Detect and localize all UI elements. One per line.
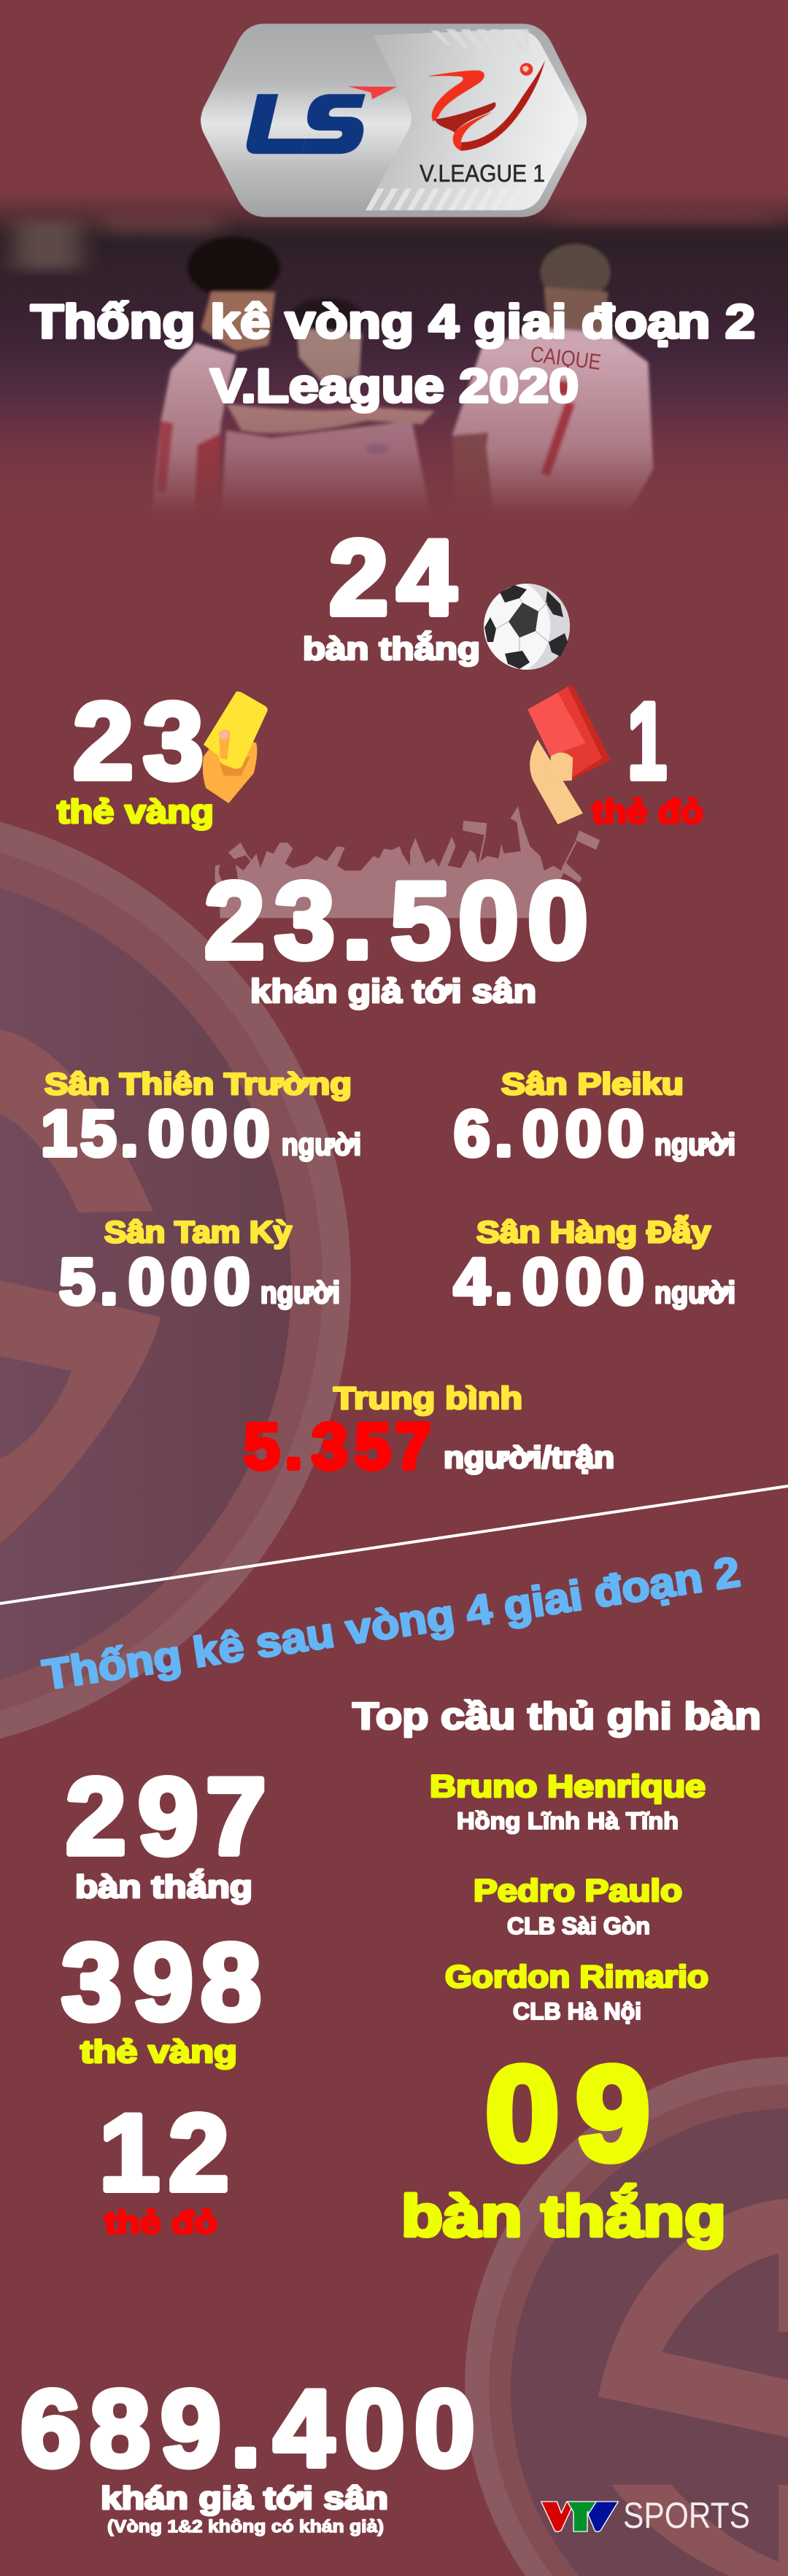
icon: yellow card in hand [203,692,268,803]
divider line [0,1486,788,1604]
stat: 1 red card [592,680,703,830]
background emblem: left [0,822,351,1738]
stat: 297 goals: 297 [66,1755,266,1877]
stadium: Tam Kỳ: 5.000 [59,1245,250,1318]
stadium: Hàng Đẫy: người [654,1275,735,1310]
stat: 689.400 total spectators: khán giả tới sân [101,2480,388,2516]
stadium: Thiên Trường [41,1067,361,1169]
logo: LS V.League 1 badge: V.LEAGUE 1 [420,160,545,187]
stadium: Tam Kỳ: người [260,1275,340,1310]
stat: 1 red card: 1 [627,680,667,802]
title: V.League 2020 [210,359,579,412]
scorer: Gordon Rimario: CLB Hà Nội [513,1998,641,2024]
stat: 09 goals: bàn thắng [401,2184,726,2248]
average attendance [244,1381,614,1482]
logo: LS V.League 1 badge [201,23,587,217]
stadium: Pleiku: người [654,1127,735,1161]
stadium: Hàng Đẫy: Sân Hàng Đẫy [476,1214,711,1249]
average attendance: 5.357 [244,1409,430,1482]
stat: 398 yellow cards: thẻ vàng [80,2034,237,2070]
logo: VTV Sports [541,2495,750,2536]
background emblem: bottom right [465,2057,788,2576]
scorer: Pedro Paulo: CLB Sài Gòn [507,1913,650,1939]
scorer: Gordon Rimario [445,1960,708,2024]
average attendance: người/trận [444,1440,614,1474]
scorer: Pedro Paulo [474,1873,682,1939]
logo: VTV Sports: SPORTS [623,2495,750,2536]
icon: football [484,584,570,670]
stat: 398 yellow cards: 398 [61,1921,261,2043]
stat: 12 red cards: thẻ đỏ [104,2205,217,2240]
scorer: Bruno Henrique [430,1769,706,1834]
stadium: Thiên Trường: người [282,1127,361,1161]
stadium: Tam Kỳ [59,1215,340,1318]
scorer: Bruno Henrique: Hồng Lĩnh Hà Tĩnh [457,1808,679,1834]
title [31,295,755,412]
header photo: players: CAIQUE [529,342,602,375]
stat: 24 goals: bàn thắng [303,630,480,667]
stat: 12 red cards: 12 [99,2092,229,2213]
stat: 24 goals [303,518,480,667]
stat: 23 yellow cards: 23 [73,680,204,802]
stadium: Pleiku: 6.000 [454,1096,644,1169]
average attendance: Trung bình [333,1381,522,1416]
scorer: Gordon Rimario: Gordon Rimario [445,1960,708,1995]
stat: 23.500 spectators: 23.500 [204,859,588,981]
stadium: Hàng Đẫy: 4.000 [454,1245,644,1318]
crowd silhouette [215,806,600,918]
stadium: Pleiku [454,1067,735,1169]
stat: 1 red card: thẻ đỏ [592,793,703,830]
icon: red card in hand [528,685,611,824]
title: Thống kê vòng 4 giai đoạn 2 [31,295,755,348]
stadium: Thiên Trường: Sân Thiên Trường [45,1067,352,1101]
stat: 09 goals: 09 [485,2038,650,2188]
stat: 09 goals [401,2038,726,2248]
stadium: Thiên Trường: 15.000 [41,1096,270,1169]
stat: 297 goals: bàn thắng [75,1868,252,1905]
scorer: Bruno Henrique: Bruno Henrique [430,1769,706,1804]
stat: 23 yellow cards: thẻ vàng [57,793,214,830]
heading: top scorers: Top cầu thủ ghi bàn [352,1695,761,1738]
stat: 689.400 total spectators: (Vòng 1&2 không có khán giả) [107,2517,384,2537]
stadium: Hàng Đẫy [454,1214,735,1318]
section heading: Thống kê sau vòng 4 giai đoạn 2 [39,1548,743,1699]
stat: 24 goals: 24 [329,518,456,637]
header photo: players [0,191,788,529]
stadium: Tam Kỳ: Sân Tam Kỳ [104,1215,293,1249]
stat: 689.400 total spectators: 689.400 [20,2367,475,2489]
scorer: Pedro Paulo: Pedro Paulo [474,1873,682,1908]
stadium: Pleiku: Sân Pleiku [501,1067,684,1101]
stat: 23 yellow cards [57,680,214,830]
stat: 23.500 spectators: khán giả tới sân [250,972,536,1010]
